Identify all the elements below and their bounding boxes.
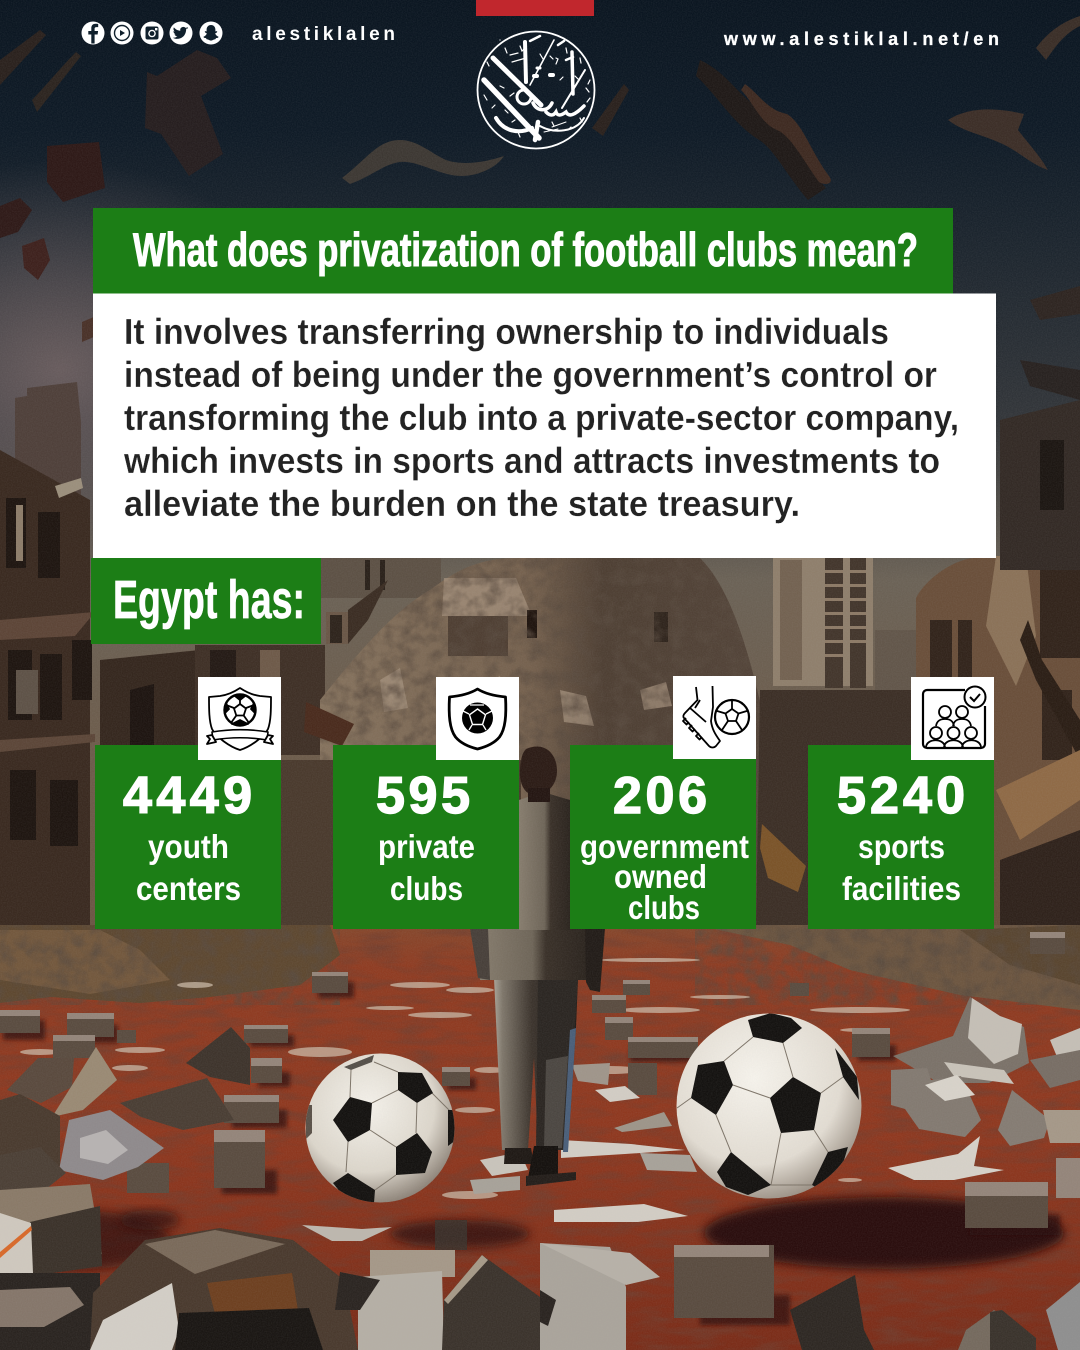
shadows on ground (0, 1197, 1064, 1270)
icon: facebook (82, 22, 104, 44)
icon: youtube (110, 22, 134, 44)
stat card: government owned clubs (570, 676, 756, 929)
definition text panel: It involves transferring ownership to individuals (124, 311, 889, 352)
definition text panel: instead of being under the government’s control or (124, 354, 937, 395)
broken slabs and plastic, left (0, 1027, 250, 1197)
number: 4449: 4449 (123, 767, 252, 825)
icon: instagram (140, 22, 164, 44)
stat card: sports facilities (808, 677, 994, 929)
icon: boot kicking football (673, 676, 756, 759)
foreground rubble, bottom (0, 1184, 1080, 1350)
heading: Egypt has: Egypt has: (113, 570, 305, 630)
definition text panel: which invests in sports and attracts investments to (123, 440, 940, 481)
label: government owned clubs: owned (614, 858, 707, 895)
social media icons (82, 22, 222, 44)
logo: circular Arabic calligraphy seal (478, 32, 594, 148)
number: 206: 206 (613, 767, 707, 825)
label: private clubs: private (378, 828, 475, 865)
icon: shield crest with football and ribbon (198, 677, 281, 760)
football, left (306, 1054, 456, 1203)
definition text panel: transforming the club into a private-sector company, (124, 397, 959, 438)
label: private clubs: clubs (390, 870, 463, 907)
football, right (676, 1013, 862, 1198)
label: youth centers: youth (148, 828, 229, 865)
label: government owned clubs: clubs (628, 889, 700, 926)
icon: twitter (170, 22, 192, 44)
website address: www.alestiklal.net/en (723, 29, 999, 49)
label: private clubs (378, 828, 475, 907)
title banner (93, 208, 953, 294)
label: youth centers (136, 828, 241, 907)
number: 5240: 5240 (837, 767, 965, 825)
icon: crowd with check badge (911, 677, 994, 760)
label: sports facilities: facilities (842, 870, 961, 907)
icon: solid shield with football (436, 677, 519, 760)
stat card: youth centers (95, 677, 281, 929)
crumpled sheets, right (888, 997, 1080, 1180)
icon: snapchat (200, 22, 222, 44)
rubble heaps at pitch edges (0, 925, 1080, 1010)
central rubble mound (281, 558, 790, 933)
top red bar (476, 0, 594, 16)
stat card: private clubs (333, 677, 519, 929)
far skyline behind the mound (321, 558, 700, 598)
label: sports facilities: sports (858, 828, 945, 865)
social handle: alestiklalen (252, 24, 395, 45)
flying debris (0, 16, 1080, 400)
definition text panel (93, 294, 996, 558)
left ruined building (0, 382, 325, 930)
definition text panel: alleviate the burden on the state treasury. (124, 483, 800, 524)
label: government owned clubs: government (580, 828, 749, 865)
red earth ground (0, 925, 1080, 1350)
concrete blocks (0, 932, 1080, 1325)
number: 595: 595 (376, 767, 470, 825)
paper scraps beside the man (302, 1063, 697, 1241)
man in suit seen from behind (470, 746, 605, 1186)
right city: tower and ruined blocks (756, 400, 1080, 938)
heading: Egypt has (91, 558, 321, 644)
label: sports facilities (842, 828, 961, 907)
label: government owned clubs (580, 828, 749, 926)
label: youth centers: centers (136, 870, 241, 907)
scattered paper flecks (20, 958, 950, 1199)
